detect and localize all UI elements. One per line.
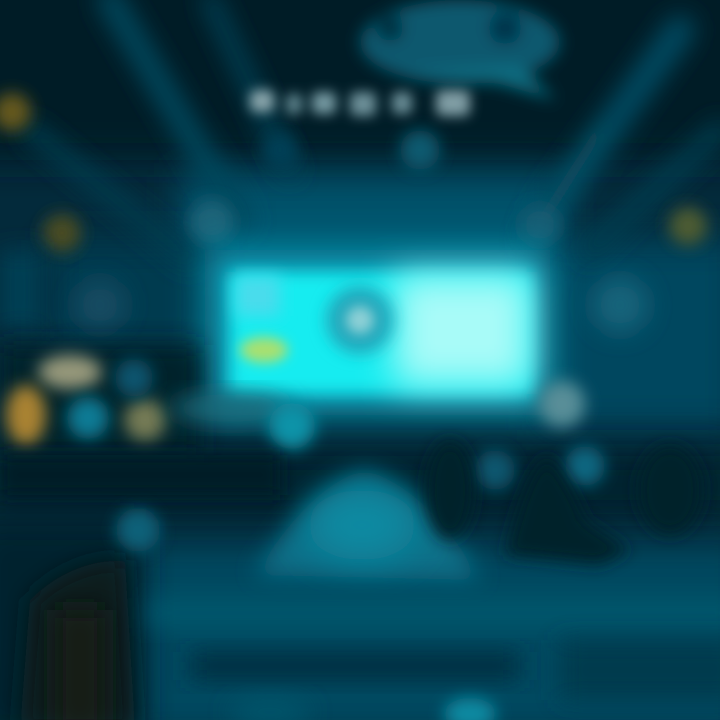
ceiling beams bbox=[30, 0, 720, 260]
lower screen reflections bbox=[116, 381, 605, 552]
foreground dark figure bbox=[20, 560, 135, 720]
left cluster of warm lights bbox=[0, 345, 200, 455]
side lights bbox=[0, 93, 707, 333]
audience silhouettes bbox=[0, 440, 702, 565]
central mound bbox=[255, 470, 480, 580]
lower floor bands bbox=[150, 598, 720, 720]
blurred title bbox=[250, 90, 470, 116]
top emblem bbox=[264, 0, 560, 170]
glowing central screen bbox=[205, 250, 550, 415]
